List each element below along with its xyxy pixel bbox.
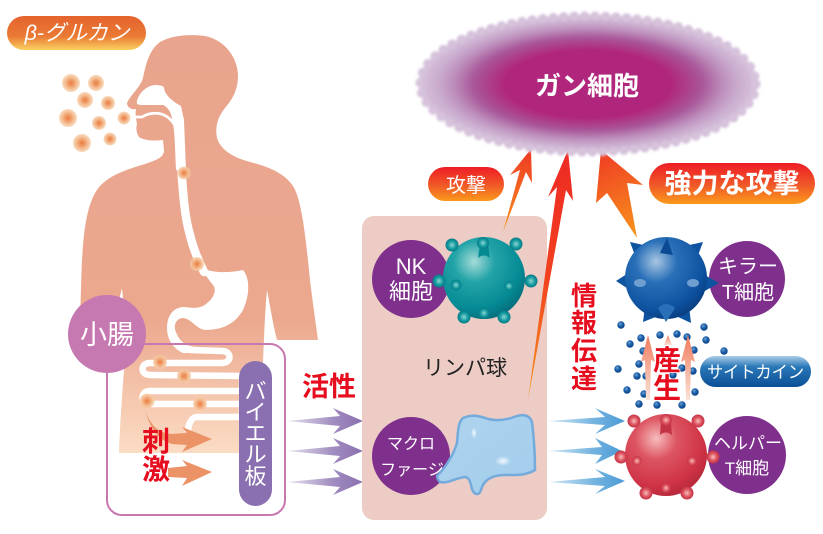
killer T cell: キラー — [718, 256, 778, 278]
small intestine label — [68, 295, 146, 373]
NK cell: NK — [396, 254, 427, 279]
macrophage — [372, 415, 535, 495]
strong attack label — [649, 163, 815, 204]
helper T cell — [614, 414, 786, 500]
attack arrow from NK cell — [503, 149, 532, 232]
esophagus — [181, 165, 204, 272]
cytokine label: サイトカイン — [707, 363, 804, 382]
stimulus arrows — [145, 410, 212, 486]
pill: beta-glucan label — [7, 16, 146, 50]
production label: 産 — [653, 345, 681, 376]
killer T cell: T細胞 — [722, 281, 774, 304]
killer T cell — [616, 237, 785, 323]
NK cell — [372, 237, 538, 324]
macrophage: ファージ — [380, 462, 444, 479]
Peyer's patch: イ — [244, 400, 267, 425]
cancer cell — [419, 15, 757, 153]
panel: lymphocytes — [362, 216, 547, 520]
Peyer's patch — [239, 361, 272, 506]
small intestine detail box — [107, 344, 285, 515]
attack arrow from macrophage — [528, 150, 573, 400]
production label: 生 — [653, 373, 681, 404]
cytokine dots — [614, 321, 728, 409]
stimulus label: 刺 — [142, 426, 170, 457]
NK cell: 細胞 — [389, 279, 433, 304]
information transfer label: 達 — [571, 364, 597, 394]
mouth opening — [135, 113, 174, 124]
stimulus label: 激 — [142, 454, 170, 485]
human body silhouette — [78, 35, 318, 453]
information transfer label: 伝 — [571, 336, 597, 366]
attack label: 攻撃 — [446, 174, 486, 197]
cancer cell: ガン細胞 — [535, 71, 639, 101]
cytokine label — [700, 356, 811, 387]
information transfer label: 報 — [571, 308, 597, 338]
production arrows — [641, 335, 695, 400]
Peyer's patch: ル — [244, 442, 267, 467]
strong attack arrow from killer T cell — [596, 150, 643, 238]
nasal cavity and throat — [137, 85, 186, 170]
strong attack label: 強力な攻撃 — [664, 169, 800, 199]
information transfer label: 情 — [571, 281, 597, 311]
helper T cell: T細胞 — [725, 459, 769, 478]
small intestine label: 小腸 — [80, 320, 134, 350]
purple arrows — [287, 408, 363, 495]
attack label — [428, 167, 504, 201]
lymphocyte label: リンパ球 — [423, 357, 507, 380]
stomach and intestines — [142, 268, 248, 432]
Peyer's patch: バ — [244, 379, 267, 404]
pill: beta-glucan label: β-グルカン — [24, 21, 131, 45]
Peyer's patch: 板 — [244, 464, 267, 489]
activation label: 活性 — [302, 372, 356, 402]
beta-glucan particles — [59, 74, 207, 411]
blue arrows — [548, 408, 625, 494]
Peyer's patch: エ — [244, 421, 267, 446]
helper T cell: ヘルパー — [714, 434, 782, 453]
macrophage: マクロ — [387, 435, 435, 453]
